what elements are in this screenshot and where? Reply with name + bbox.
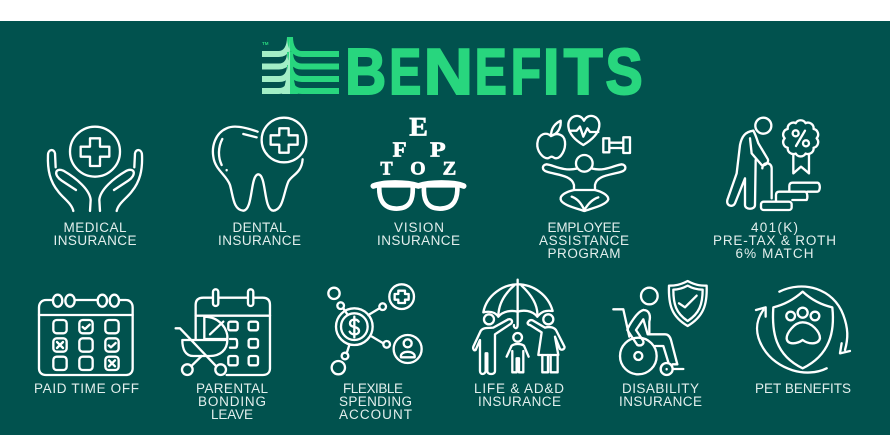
eye chart letters: O bbox=[410, 158, 426, 179]
label: INSURANCE bbox=[619, 394, 702, 409]
icon: eye chart and glasses bbox=[373, 113, 464, 209]
panel: flexible spending account bbox=[328, 284, 422, 422]
logo: tree mark bbox=[262, 37, 339, 94]
label: INSURANCE bbox=[478, 394, 561, 409]
label: INSURANCE bbox=[218, 233, 301, 248]
title: E bbox=[389, 35, 421, 108]
label: ACCOUNT bbox=[339, 407, 412, 422]
panel: medical insurance bbox=[48, 127, 142, 248]
logo: trademark: TM bbox=[262, 41, 269, 46]
label: FLEXIBLE bbox=[343, 381, 403, 396]
icon: paw shield with cycle arrows bbox=[756, 287, 850, 373]
title: I bbox=[543, 35, 560, 108]
panel: dental insurance bbox=[213, 118, 306, 248]
label: SPENDING bbox=[339, 394, 412, 409]
eye chart letters: E bbox=[409, 113, 428, 142]
label: PARENTAL bbox=[196, 381, 268, 396]
eye chart letters bbox=[380, 113, 456, 179]
title: S bbox=[606, 35, 643, 108]
label: BONDING bbox=[198, 394, 266, 409]
label: DENTAL bbox=[232, 220, 287, 235]
icon: calendar with checks and crosses bbox=[39, 295, 133, 375]
title: T bbox=[564, 35, 603, 108]
icon: dollar network bbox=[328, 284, 422, 374]
label: LEAVE bbox=[211, 407, 253, 422]
title: E bbox=[475, 35, 507, 108]
label: LIFE & AD&D bbox=[474, 381, 564, 396]
eye chart letters: F bbox=[393, 138, 407, 162]
label: INSURANCE bbox=[377, 233, 460, 248]
label bbox=[377, 220, 460, 248]
icon: tooth with cross bbox=[213, 118, 306, 211]
eye chart letters: P bbox=[430, 138, 446, 162]
panel: parental bonding leave bbox=[176, 289, 270, 422]
label: PROGRAM bbox=[548, 246, 620, 261]
label bbox=[713, 220, 836, 261]
icon: elder with cane, steps and rosette bbox=[727, 118, 820, 210]
panel: vision insurance bbox=[373, 113, 464, 248]
label: VISION bbox=[394, 220, 444, 235]
panel: 401(k) bbox=[713, 118, 836, 261]
glasses bbox=[373, 183, 464, 209]
title: N bbox=[424, 35, 473, 108]
label bbox=[196, 381, 268, 422]
label: PET BENEFITS bbox=[755, 381, 851, 396]
label bbox=[218, 220, 301, 248]
label: INSURANCE bbox=[54, 233, 136, 248]
icon: family under umbrella bbox=[473, 280, 565, 374]
icon: meditating figure with apple, heart, dumbbell bbox=[537, 116, 630, 211]
label bbox=[539, 220, 629, 261]
label: PRE-TAX & ROTH bbox=[713, 233, 836, 248]
icon: calendar with pram bbox=[176, 289, 270, 375]
panel: life and AD&D insurance bbox=[473, 280, 565, 409]
eye chart letters: Z bbox=[443, 158, 456, 179]
label: DISABILITY bbox=[622, 381, 699, 396]
label: PAID TIME OFF bbox=[34, 381, 139, 396]
eye chart letters: T bbox=[380, 158, 393, 179]
label: 401(K) bbox=[751, 220, 798, 235]
icon: hands holding medical cross bbox=[48, 127, 142, 211]
label: 6% MATCH bbox=[736, 246, 814, 261]
title bbox=[345, 35, 643, 108]
panel: employee assistance program bbox=[537, 116, 630, 261]
label: ASSISTANCE bbox=[539, 233, 629, 248]
label bbox=[474, 381, 564, 409]
title: B bbox=[345, 35, 386, 108]
label bbox=[54, 220, 136, 248]
title: F bbox=[511, 35, 541, 108]
label bbox=[339, 381, 412, 422]
label: MEDICAL bbox=[64, 220, 127, 235]
panel: disability insurance bbox=[613, 281, 707, 409]
label: EMPLOYEE bbox=[548, 220, 620, 235]
label bbox=[619, 381, 702, 409]
panel: paid time off bbox=[34, 295, 139, 396]
icon: wheelchair with shield bbox=[613, 281, 707, 375]
panel: pet benefits bbox=[755, 287, 851, 396]
